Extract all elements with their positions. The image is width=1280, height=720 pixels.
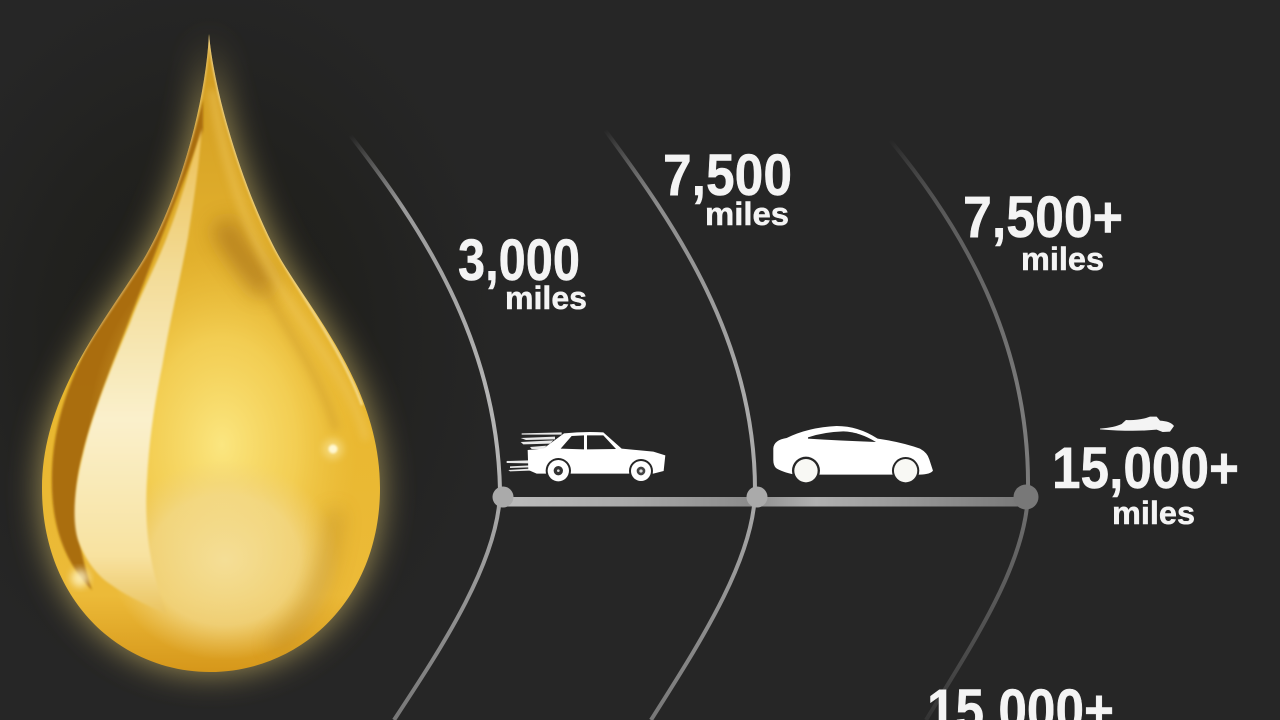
label: 7,500+ miles	[963, 185, 1123, 277]
icon: modern sedan	[773, 426, 933, 485]
label: 7,500 miles	[663, 143, 792, 232]
icon: racing car	[1100, 417, 1174, 432]
curved line 3	[890, 140, 1028, 720]
label: 7,500+ miles: 7,500+	[963, 185, 1123, 250]
label: 15,000+ miles: miles	[1112, 495, 1195, 531]
node 2	[746, 486, 768, 508]
label: 3,000 miles	[458, 228, 587, 316]
label: 7,500 miles: 7,500	[663, 143, 792, 208]
label: 7,500 miles: miles	[705, 196, 789, 232]
curved line 2	[605, 130, 755, 720]
node 3	[1014, 484, 1038, 510]
horizontal mileage bar	[500, 497, 1026, 506]
curved line 1	[350, 135, 500, 720]
icon: old speeding car	[507, 432, 665, 483]
node 1	[492, 486, 514, 508]
label: 15,000+ miles	[1052, 436, 1239, 531]
label: 3,000 miles: 3,000	[458, 228, 580, 293]
icon: golden oil drop	[42, 34, 380, 672]
label: 3,000 miles: miles	[505, 280, 587, 316]
label: 7,500+ miles: miles	[1021, 241, 1104, 277]
label: 15,000+ miles: 15,000+	[1052, 436, 1239, 501]
